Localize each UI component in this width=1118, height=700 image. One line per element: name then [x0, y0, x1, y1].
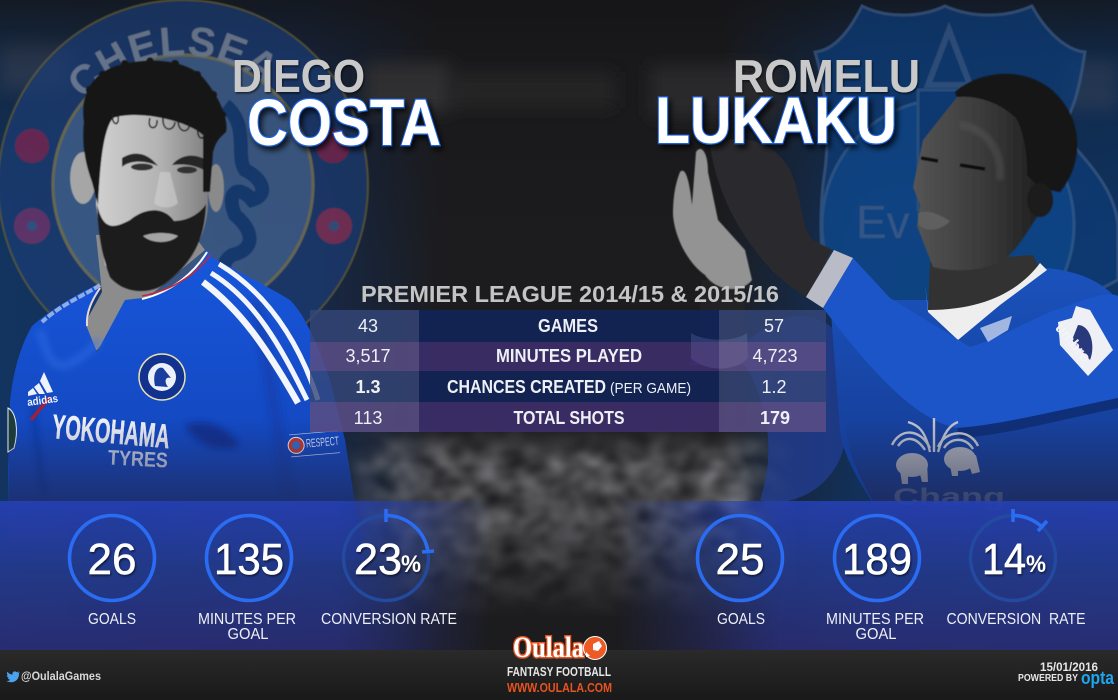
footer bar	[0, 650, 1118, 700]
sleeve trim	[31, 397, 50, 420]
stat: Lukaku conversion rate	[946, 509, 1086, 628]
table title: PREMIER LEAGUE 2014/15 & 2015/16	[361, 281, 779, 307]
beard	[97, 204, 206, 291]
row: games	[358, 316, 784, 336]
crest roses and balls	[14, 129, 352, 244]
row: minutes played: 4,723	[752, 346, 798, 366]
player: Diego Costa	[8, 58, 364, 560]
crest lion	[224, 105, 262, 296]
head	[913, 74, 1077, 270]
stat: Costa goals: GOALS	[88, 611, 136, 628]
back of hand	[710, 139, 833, 297]
cuff	[806, 250, 853, 308]
adidas logo	[26, 372, 59, 409]
Everton crest	[815, 6, 1118, 351]
white collar	[925, 263, 1047, 340]
stat: Costa goals	[70, 516, 154, 628]
date and powered by: POWERED BY	[1018, 672, 1078, 684]
name: Romelu Lukaku	[655, 50, 920, 157]
stat: Costa conversion rate: 23	[354, 535, 402, 584]
stat: Lukaku conversion rate: CONVERSION RATE	[946, 611, 1086, 628]
name: Diego Costa: COSTA	[247, 85, 441, 159]
respect patch	[287, 431, 340, 457]
stat: Lukaku conversion rate: 14	[982, 535, 1026, 584]
stat: Costa conversion rate: %	[401, 551, 421, 578]
row: total shots	[354, 408, 790, 428]
stat: Lukaku goals: GOALS	[717, 611, 765, 628]
row: games: 43	[358, 316, 378, 336]
stat: Lukaku goals: 25	[716, 535, 764, 584]
adidas logo: adidas	[26, 393, 59, 409]
row: chances created: (PER GAME)	[610, 380, 691, 397]
icon: twitter bird	[6, 671, 20, 682]
forearm behind table	[690, 316, 845, 502]
stat: Costa conversion rate	[321, 509, 457, 628]
stat: Lukaku conversion rate: %	[1026, 551, 1046, 578]
Chelsea crest	[0, 0, 370, 350]
respect patch: RESPECT	[305, 434, 340, 450]
stat: Lukaku minutes per goal: GOAL	[856, 626, 897, 643]
club badge	[139, 354, 185, 400]
row: total shots: TOTAL SHOTS	[514, 408, 624, 428]
player: Romelu Lukaku	[673, 74, 1118, 560]
row: chances created: 1.3	[355, 377, 381, 397]
stat: Costa goals: 26	[88, 535, 136, 584]
stat: Lukaku minutes per goal	[826, 516, 924, 643]
jersey collar trim	[142, 252, 207, 299]
name: Diego Costa	[232, 50, 441, 159]
row: total shots: 179	[760, 408, 790, 428]
row: total shots: 113	[354, 408, 382, 428]
row: chances created: CHANCES CREATED	[447, 377, 606, 397]
date and powered by: 15/01/2016	[1040, 660, 1098, 674]
sponsor text: YOKOHAMA	[51, 408, 171, 456]
torso	[830, 268, 1118, 560]
stat: Costa minutes per goal: MINUTES PER	[198, 611, 296, 628]
raised arm	[823, 258, 1118, 428]
crest on shirt	[980, 316, 1012, 342]
player: Diego Costa: TYRES	[107, 446, 168, 473]
palm hand	[673, 149, 752, 289]
shoulder white mark	[42, 285, 100, 322]
neck	[928, 255, 1040, 312]
stats panel background	[0, 501, 1118, 650]
stat: Costa minutes per goal	[198, 516, 296, 643]
chang sponsor	[892, 418, 1005, 511]
Oulala logo	[507, 631, 612, 695]
Oulala logo: FANTASY FOOTBALL	[507, 665, 611, 679]
stat: Lukaku minutes per goal: 189	[842, 535, 912, 584]
left badge	[8, 408, 16, 452]
stat: Costa conversion rate: CONVERSION RATE	[321, 611, 457, 628]
chang sponsor: Chang	[893, 484, 1005, 511]
hair	[83, 61, 226, 205]
icon: football	[584, 636, 606, 660]
league patch	[1058, 306, 1113, 376]
stat: Costa minutes per goal: 135	[214, 535, 284, 584]
Oulala logo: Oulala	[513, 631, 584, 664]
stats table	[310, 281, 826, 432]
head	[70, 58, 226, 291]
name: Diego Costa: DIEGO	[232, 50, 365, 102]
row: chances created: 1.2	[761, 377, 787, 397]
name: Romelu Lukaku: ROMELU	[733, 50, 920, 102]
jersey folds	[33, 300, 290, 500]
jersey stripes	[203, 264, 318, 403]
Chelsea crest: CHELSEA	[70, 26, 273, 94]
date and powered by: opta	[1081, 668, 1115, 688]
Oulala logo: WWW.OULALA.COM	[507, 681, 612, 695]
body fade	[845, 420, 1118, 560]
row: games: GAMES	[538, 316, 598, 336]
date and powered by	[1018, 660, 1115, 688]
neck	[84, 230, 205, 352]
Everton crest: Ev	[856, 196, 910, 248]
name: Romelu Lukaku: LUKAKU	[655, 83, 897, 157]
body fade	[8, 420, 364, 560]
row: minutes played	[345, 346, 798, 366]
umbro text: umbro	[1051, 320, 1094, 366]
row: minutes played: 3,517	[345, 346, 391, 366]
jersey	[8, 250, 364, 560]
row: chances created	[355, 377, 787, 397]
row: minutes played: MINUTES PLAYED	[496, 346, 642, 366]
stat: Costa minutes per goal: GOAL	[228, 626, 269, 643]
stat: Lukaku minutes per goal: MINUTES PER	[826, 611, 924, 628]
row: games: 57	[764, 316, 784, 336]
hair	[955, 74, 1077, 192]
stat: Lukaku goals	[698, 516, 782, 628]
twitter handle: @OulalaGames	[21, 671, 101, 683]
